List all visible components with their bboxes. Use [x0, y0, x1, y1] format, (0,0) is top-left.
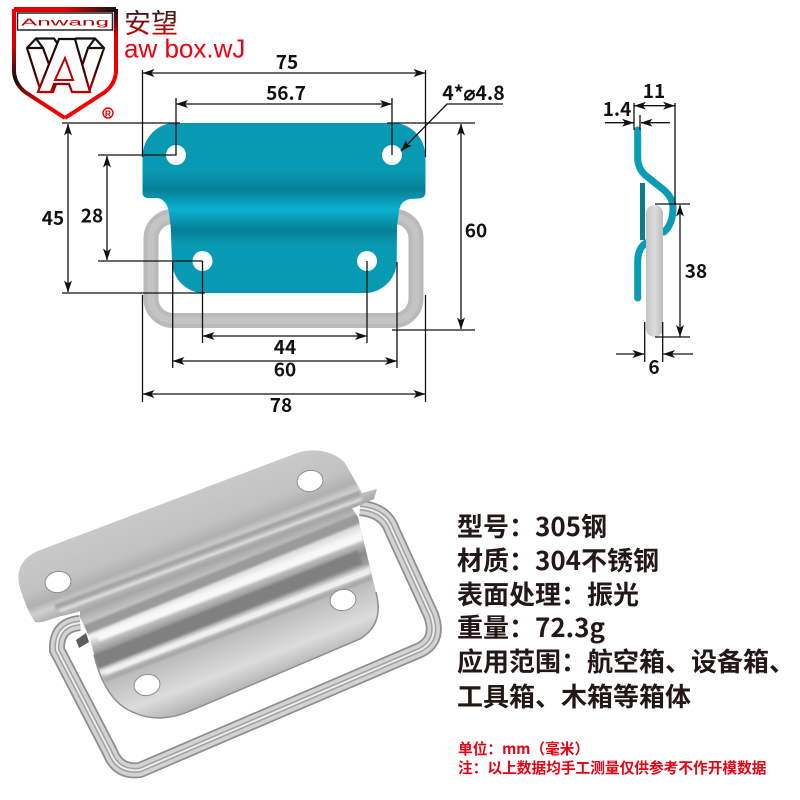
specification list: 型号：305钢	[457, 507, 607, 544]
dimension: hole callout 4 x diameter 4.8	[401, 77, 505, 151]
product photo: stainless handle	[18, 450, 434, 770]
dimension: 56.7 hole spacing	[98, 79, 392, 155]
dimension: 6 rod diameter	[616, 322, 693, 380]
dimension: 60 lower plate width	[173, 262, 397, 382]
photo: wire ring	[57, 508, 434, 770]
dimension: hole callout 4 x diameter 4.8: 4*⌀4.8	[442, 77, 505, 106]
photo: upper plate fold highlight	[55, 493, 362, 611]
dimension: 45 plate height	[42, 123, 475, 293]
footnote: units and disclaimer	[458, 738, 767, 778]
specification list: 重量：72.3g	[457, 608, 605, 645]
dimension: 11 side depth	[634, 77, 675, 205]
photo: upper plate	[18, 450, 377, 622]
dimension: 11 side depth: 11	[643, 77, 665, 104]
brand name: aw box.wJ	[124, 34, 245, 64]
brand name: 安望	[124, 2, 178, 41]
dimension: 28 hole offset	[81, 156, 202, 261]
specification list	[457, 507, 795, 714]
dimension: 60 overall height: 60	[465, 216, 487, 244]
dimension: 28 hole offset: 28	[81, 202, 103, 228]
logo: Anwang shield	[14, 9, 116, 118]
dimension: 6 rod diameter: 6	[648, 353, 660, 380]
photo: upper plate holes	[43, 468, 325, 595]
footnote: units and disclaimer: 注：以上数据均手工测量仅供参考不作开模数据	[458, 757, 767, 778]
brand name	[124, 2, 245, 64]
dimension: 60 lower plate width: 60	[274, 356, 296, 382]
front view: teal plate	[142, 123, 426, 293]
photo: lower plate holes	[132, 587, 358, 698]
specification list: 工具箱、木箱等箱体	[457, 677, 691, 714]
photo: lower plate with bends	[80, 505, 378, 718]
dimension: 56.7 hole spacing: 56.7	[266, 79, 306, 106]
registered mark: R	[105, 108, 111, 118]
dimension: 75 overall width: 75	[276, 48, 298, 75]
specification list: 材质：304不锈钢	[457, 541, 659, 578]
logo wordmark: Anwang	[21, 18, 109, 28]
specification list: 表面处理：振光	[457, 575, 639, 612]
side view profile	[638, 130, 673, 337]
dimension: 38 ring depth	[655, 204, 707, 337]
footnote: units and disclaimer: 单位：mm（毫米）	[458, 738, 589, 759]
dimension: 78 ring width: 78	[270, 391, 292, 418]
front view: mounting holes	[166, 145, 402, 271]
logo W and A monogram	[27, 38, 104, 92]
dimension: 78 ring width	[142, 295, 426, 418]
dimension: 1.4 sheet thickness	[603, 95, 670, 130]
dimension: 1.4 sheet thickness: 1.4	[603, 95, 631, 122]
photo: ring shadow under plate	[76, 633, 89, 648]
front view: ring handle	[151, 216, 416, 320]
dimension: 45 plate height: 45	[42, 204, 64, 231]
dimension: 38 ring depth: 38	[685, 257, 707, 284]
dimension: 44 lower hole spacing	[202, 261, 367, 360]
dimension: 75 overall width	[142, 48, 426, 157]
dimension: 44 lower hole spacing: 44	[274, 333, 296, 360]
photo: lower plate outline	[94, 592, 378, 718]
specification list: 应用范围：航空箱、设备箱、	[457, 642, 795, 679]
